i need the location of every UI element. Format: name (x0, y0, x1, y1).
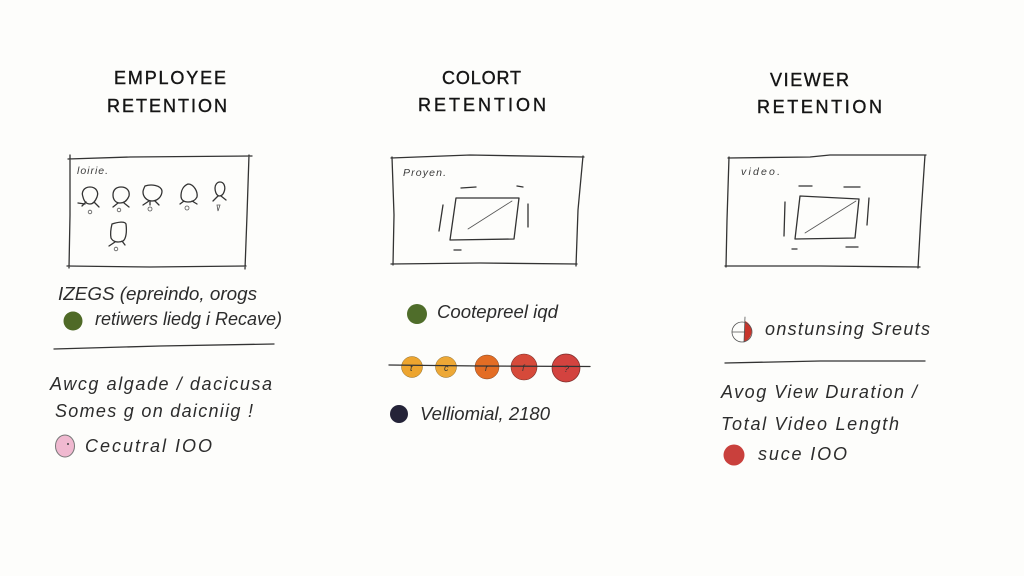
icon: navy dot (390, 405, 408, 423)
heading: cohort retention: COLORT (442, 68, 521, 88)
divider (54, 344, 274, 349)
text: formula line two: retiwers liedg i Recave) (95, 309, 282, 329)
icon: half red circle (732, 317, 752, 342)
text: milestone label: Velliomial, 2180 (420, 404, 550, 424)
icon: green dot (64, 312, 82, 330)
heading: employee retention: RETENTION (107, 96, 227, 116)
frame label: employees: loirie. (77, 165, 108, 177)
text: cohort label: Cootepreel iqd (437, 302, 559, 322)
text: viewer formula: Total Video Length (721, 414, 899, 434)
sketch frame: video (725, 155, 926, 268)
text: viewer value: suce IOO (758, 444, 847, 464)
chart: timeline dots (389, 354, 590, 382)
heading: viewer retention (757, 70, 882, 117)
panel: viewer retention (720, 70, 930, 466)
icon: red dot (724, 444, 744, 466)
sketch frame: project (391, 155, 584, 266)
heading: viewer retention: VIEWER (770, 70, 849, 90)
heading: viewer retention: RETENTION (757, 97, 882, 117)
heading: employee retention (107, 68, 227, 116)
panel: cohort retention (389, 68, 590, 424)
divider (725, 361, 925, 363)
text: formula line one: IZEGS (epreindo, orogs (58, 284, 257, 304)
text: average formula (49, 374, 272, 421)
icon: video placeholder (439, 186, 528, 250)
text: viewer formula (720, 382, 919, 434)
chart: timeline dots: ? (564, 364, 569, 374)
frame label: project: Proyen. (403, 167, 446, 179)
sketch frame: employees (67, 155, 252, 269)
panel: employee retention (49, 68, 282, 457)
text: central value: Cecutral IOO (85, 436, 212, 456)
chart: timeline dots: f (522, 363, 526, 373)
icon: video placeholder (784, 186, 869, 249)
chart: timeline dots: r (485, 363, 489, 373)
text: viewer formula: Avog View Duration / (720, 382, 919, 402)
heading: employee retention: EMPLOYEE (114, 68, 226, 88)
text: average formula: Awcg algade / dacicusa (49, 374, 272, 394)
chart: timeline dots: c (444, 363, 449, 373)
chart: timeline dots: t (410, 363, 413, 373)
text: viewer label: onstunsing Sreuts (765, 319, 930, 339)
frame label: video: video. (741, 166, 780, 178)
heading: cohort retention: RETENTION (418, 95, 546, 115)
icon: people group (78, 182, 226, 251)
text: average formula: Somes g on daicniig ! (55, 401, 253, 421)
icon: green dot (407, 304, 427, 324)
heading: cohort retention (418, 68, 546, 115)
icon: pink dot (56, 435, 74, 457)
